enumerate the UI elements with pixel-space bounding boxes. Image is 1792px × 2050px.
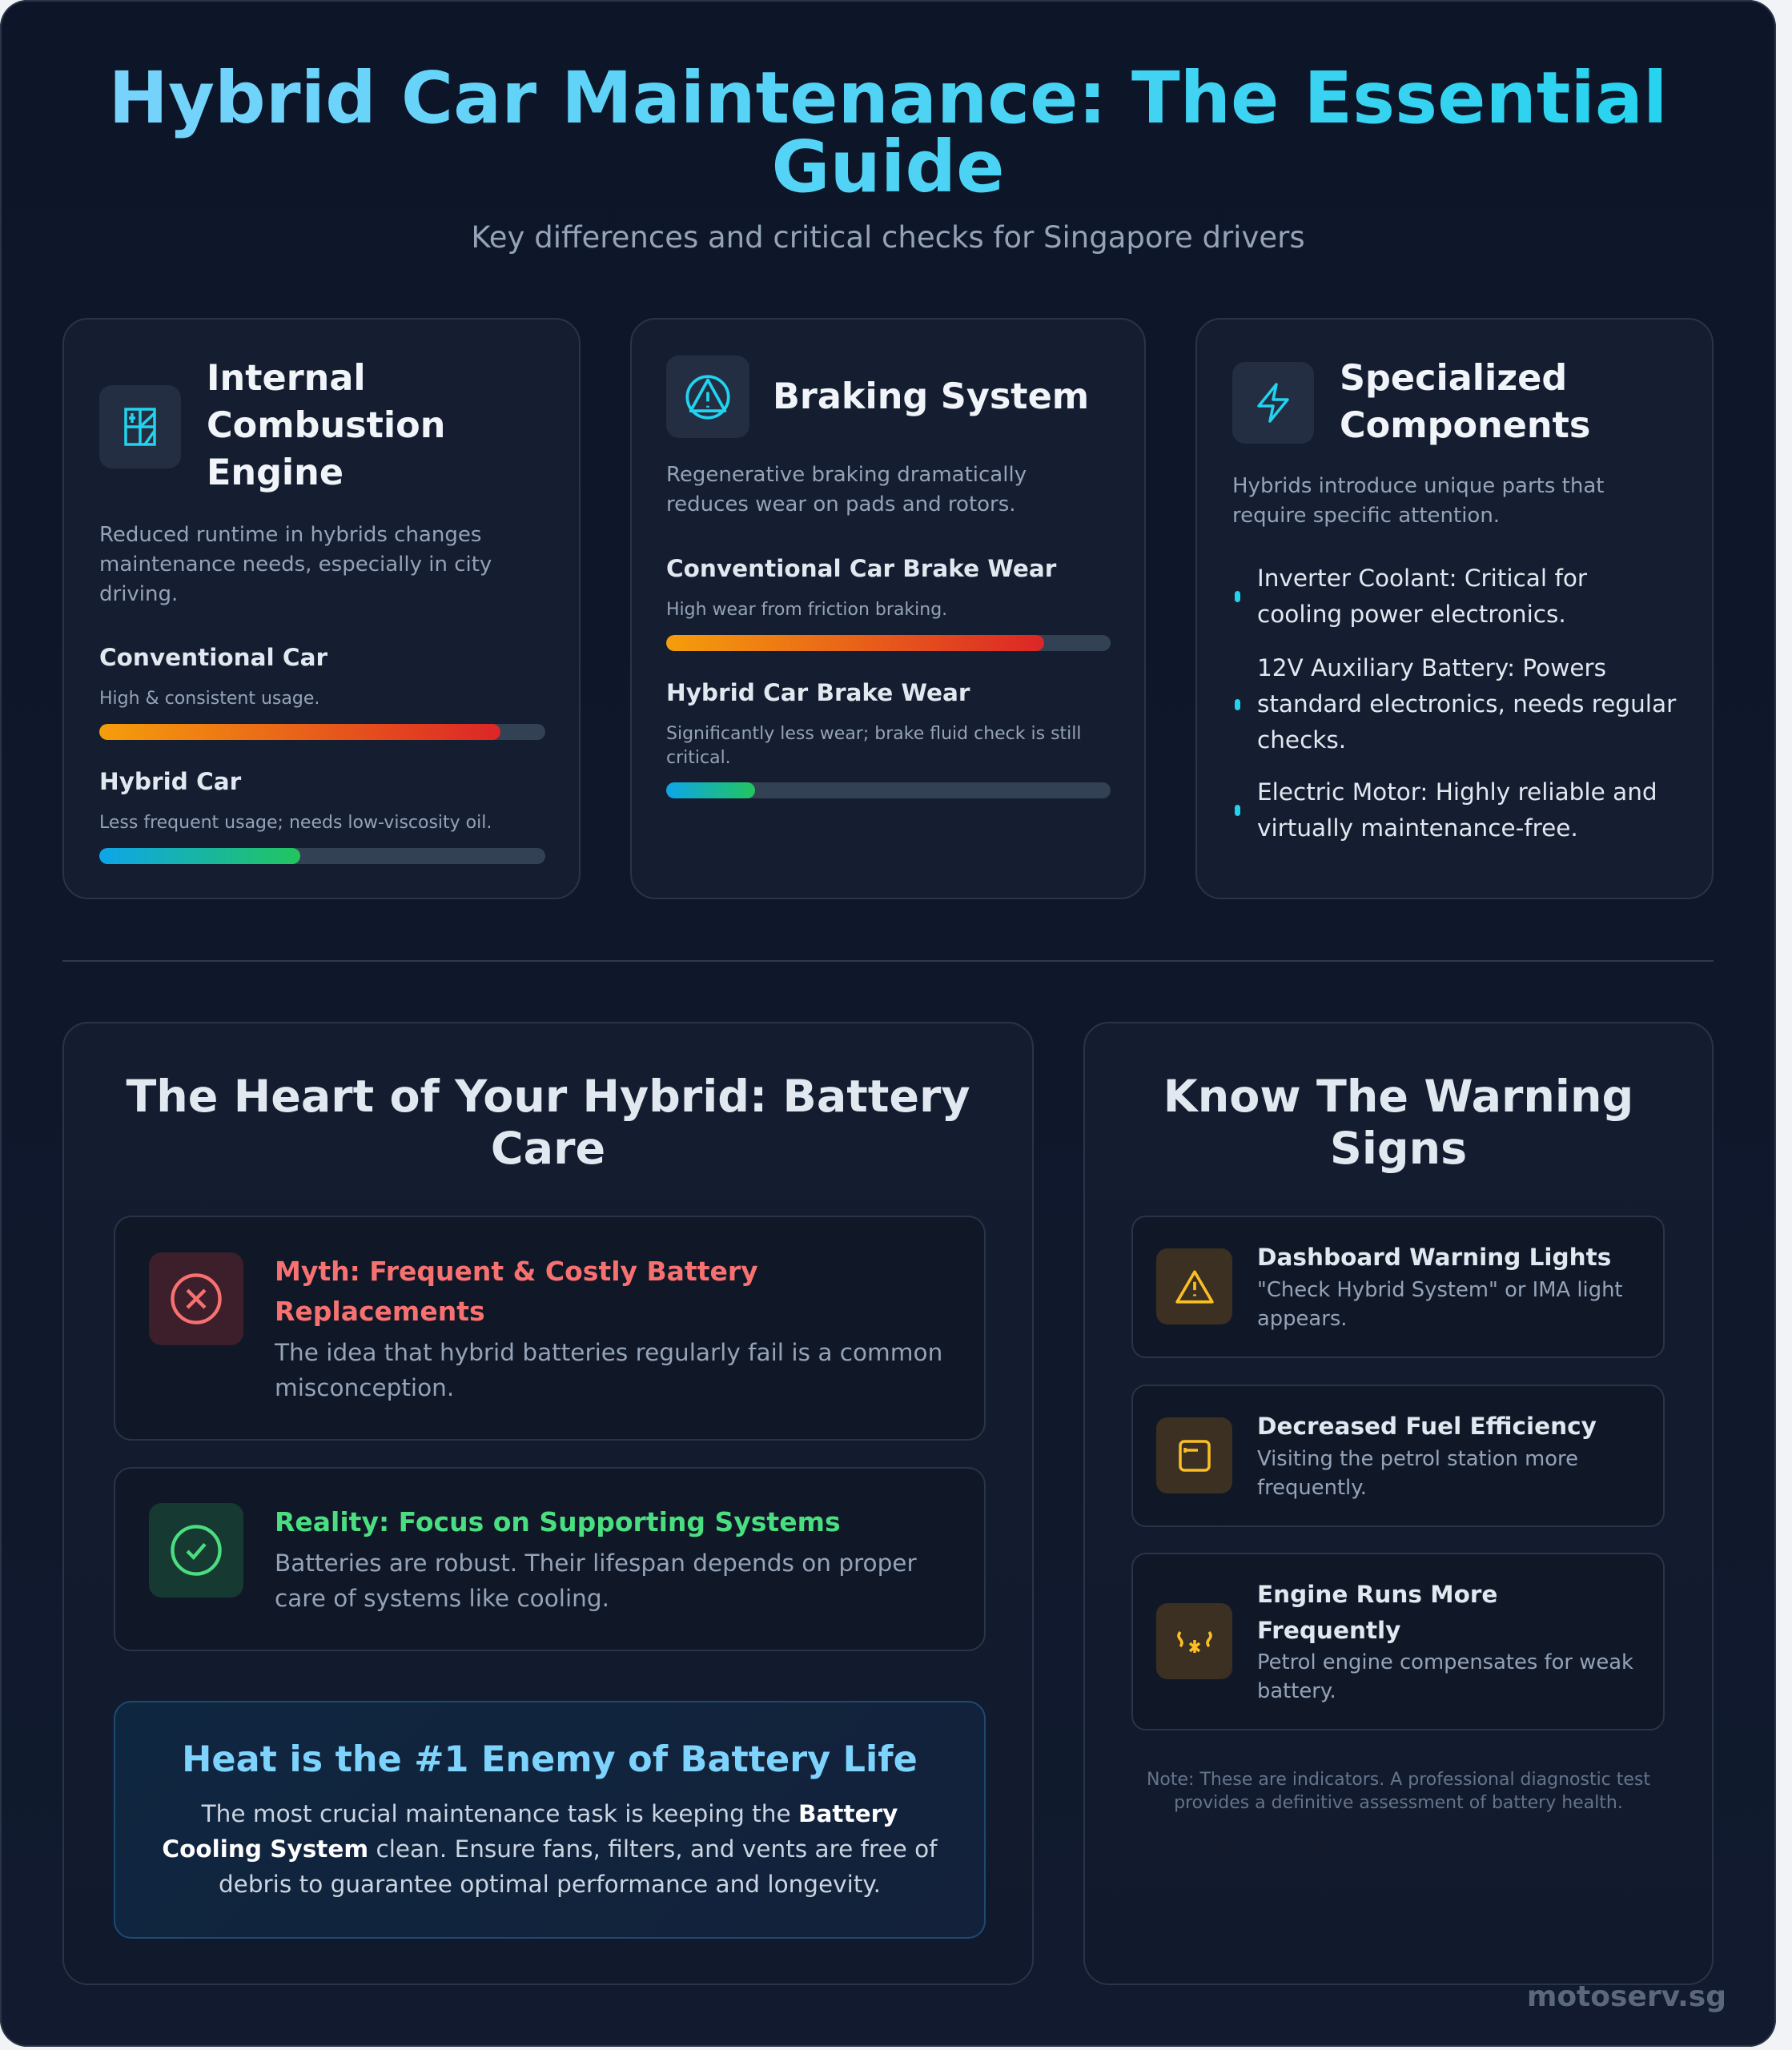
card title: Internal [207,358,366,399]
icon: lightning [1232,362,1314,444]
bullet: 12V battery [1235,654,1677,754]
subtitle: Key differences and critical checks for Singapore drivers [471,220,1305,255]
card title [207,358,445,493]
warning: engine runs more [1131,1553,1665,1730]
panel: internal combustion engine: High & consistent usage. [99,689,319,709]
card title: Braking System [773,376,1089,417]
myth box: Replacements [275,1296,485,1327]
title: Hybrid Car Maintenance: The Essential [109,56,1667,139]
card title: Combustion [207,405,445,446]
icon: brake warning [666,356,749,438]
label: conventional: Conventional Car [99,644,327,671]
note [1147,1770,1650,1813]
heading: The Heart of Your Hybrid: Battery [126,1071,970,1123]
warning: dashboard lights: "Check Hybrid System" or IMA light [1257,1278,1623,1302]
panel: warning signs [1083,1022,1714,1985]
bullet: electric motor: Electric Motor: Highly reliable and [1257,778,1657,806]
label: conventional brake wear: Conventional Car Brake Wear [666,555,1056,582]
label: hybrid: Hybrid Car [99,768,241,795]
warning: fuel efficiency: Decreased Fuel Efficiency [1257,1413,1597,1440]
bullet: inverter coolant [1235,565,1587,628]
callout: heat: Heat is the #1 Enemy of Battery Life [182,1739,918,1780]
heading: Signs [1330,1123,1467,1175]
panel: internal combustion engine: Less frequent usage; needs low-viscosity oil. [99,813,492,833]
warning: fuel efficiency: Visiting the petrol station more [1257,1447,1578,1471]
bar: conventional usage [99,724,545,740]
title: Guide [772,125,1004,208]
bullet: electric motor [1235,778,1657,842]
heading [126,1071,970,1175]
reality box: Reality: Focus on Supporting Systems [275,1506,841,1538]
bar: hybrid brake wear [666,782,1111,798]
panel: braking system: High wear from friction braking. [666,600,947,620]
reality box [114,1467,986,1651]
bar: hybrid usage [99,848,545,864]
description: reduces wear on pads and rotors. [666,492,1016,517]
bar: conventional brake wear [666,635,1111,651]
warning: dashboard lights: appears. [1257,1307,1347,1331]
callout: heat: The most crucial maintenance task is keeping the Battery [202,1800,898,1827]
panel: internal combustion engine [62,318,581,899]
warning: engine runs more: Engine Runs More [1257,1581,1497,1608]
icon: engine [1156,1603,1232,1679]
icon: warning triangle [1156,1248,1232,1324]
myth box: The idea that hybrid batteries regularly fail is a common [275,1339,942,1366]
bullet: 12V battery: checks. [1257,726,1346,754]
warning: fuel efficiency: frequently. [1257,1476,1367,1500]
warning: engine runs more: battery. [1257,1679,1336,1703]
callout: heat: Cooling System clean. Ensure fans, filters, and vents are free of [162,1835,938,1863]
bullet: inverter coolant: cooling power electronics. [1257,601,1566,628]
description [1232,474,1604,528]
warning: dashboard lights: Dashboard Warning Lights [1257,1244,1611,1271]
title [0,63,1776,201]
panel: braking system: Significantly less wear; brake fluid check is still [666,724,1081,744]
card title: Engine [207,452,344,493]
icon: fuel gauge [1156,1417,1232,1493]
icon: reality check [149,1503,243,1598]
description: driving. [99,582,178,606]
description [666,463,1027,517]
myth box: misconception. [275,1374,454,1401]
bullet: electric motor: virtually maintenance-free. [1257,814,1578,842]
description [99,523,492,606]
card title: Components [1340,405,1590,446]
panel: braking system [630,318,1146,899]
description: Reduced runtime in hybrids changes [99,523,481,547]
heading: Care [491,1123,605,1175]
warning: dashboard lights [1131,1216,1665,1358]
note: provides a definitive assessment of battery health. [1174,1793,1623,1813]
icon: myth cross [149,1252,243,1345]
description: Hybrids introduce unique parts that [1232,474,1604,498]
warning: fuel efficiency [1131,1385,1665,1527]
panel: braking system: critical. [666,748,731,768]
description: Regenerative braking dramatically [666,463,1027,487]
callout: heat [114,1701,986,1939]
warning: engine runs more: Frequently [1257,1617,1400,1644]
footer brand: motoserv.sg [1527,1980,1726,2013]
warning: engine runs more: Petrol engine compensates for weak [1257,1650,1633,1674]
bullet: inverter coolant: Inverter Coolant: Critical for [1257,565,1587,592]
card title [1340,358,1590,446]
description: maintenance needs, especially in city [99,553,492,577]
card title: Specialized [1340,358,1567,399]
label: hybrid brake wear: Hybrid Car Brake Wear [666,679,970,706]
bullet: 12V battery: 12V Auxiliary Battery: Powers [1257,654,1606,681]
panel: specialized components [1195,318,1714,899]
icon: engine [99,385,181,468]
myth box [114,1216,986,1441]
reality box: care of systems like cooling. [275,1585,609,1612]
heading: Know The Warning [1163,1071,1633,1123]
bullet: 12V battery: standard electronics, needs regular [1257,690,1676,718]
myth box: Myth: Frequent & Costly Battery [275,1256,758,1287]
reality box: Batteries are robust. Their lifespan depends on proper [275,1550,917,1577]
description: require specific attention. [1232,504,1500,528]
callout: heat: debris to guarantee optimal performance and longevity. [219,1871,881,1898]
note: Note: These are indicators. A professional diagnostic test [1147,1770,1650,1790]
panel: battery care [62,1022,1034,1985]
heading [1163,1071,1633,1175]
